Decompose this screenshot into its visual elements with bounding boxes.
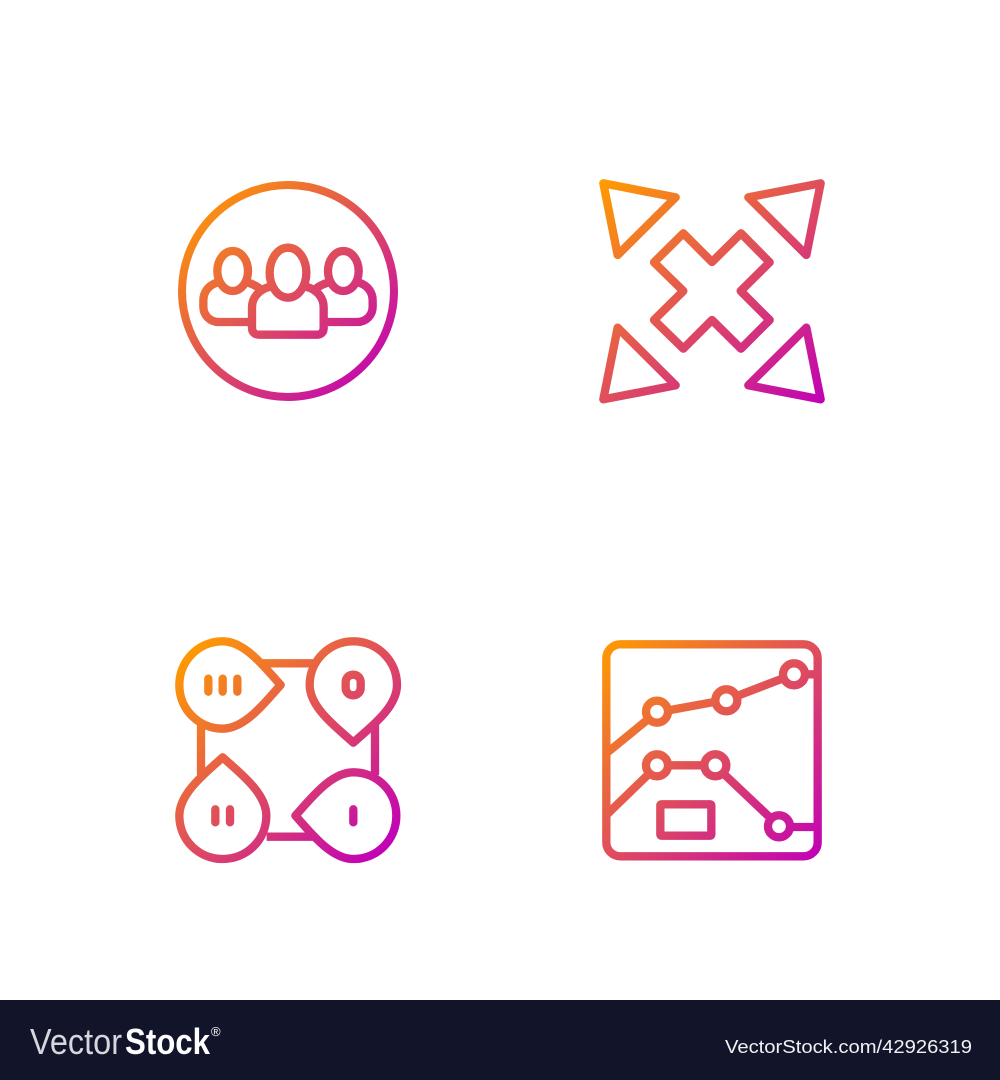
VectorStock logo: ® [211,1024,221,1039]
icon: four map pins connected in a square [179,641,397,859]
arrow: bottom left [603,328,676,399]
arrow: bottom right [748,328,821,399]
icon: group of people in circle [182,185,394,397]
VectorStock logo: Vector [30,1021,122,1062]
lower data line [606,754,818,837]
pin: bottom left with two bars [179,757,266,859]
left person [203,251,260,322]
icon: line chart in a rounded square [606,644,818,856]
arrow: top left [603,183,676,255]
pin: bottom right with one bar [295,772,396,859]
centre person [252,248,324,335]
right person [316,251,373,322]
VectorStock logo: Stock [125,1021,211,1062]
chart frame [606,644,818,856]
arrow: top right [748,183,821,255]
upper data line [606,663,818,753]
legend box [660,804,711,836]
pin: top right with zero [310,641,397,743]
icon: four arrows around a cross [603,183,821,399]
connector lines [201,663,375,837]
footer bar [0,1000,1000,1080]
pin: top left with three bars [179,641,281,729]
cross [654,233,770,349]
image id text: VectorStock.com/42926319 [725,1037,972,1057]
